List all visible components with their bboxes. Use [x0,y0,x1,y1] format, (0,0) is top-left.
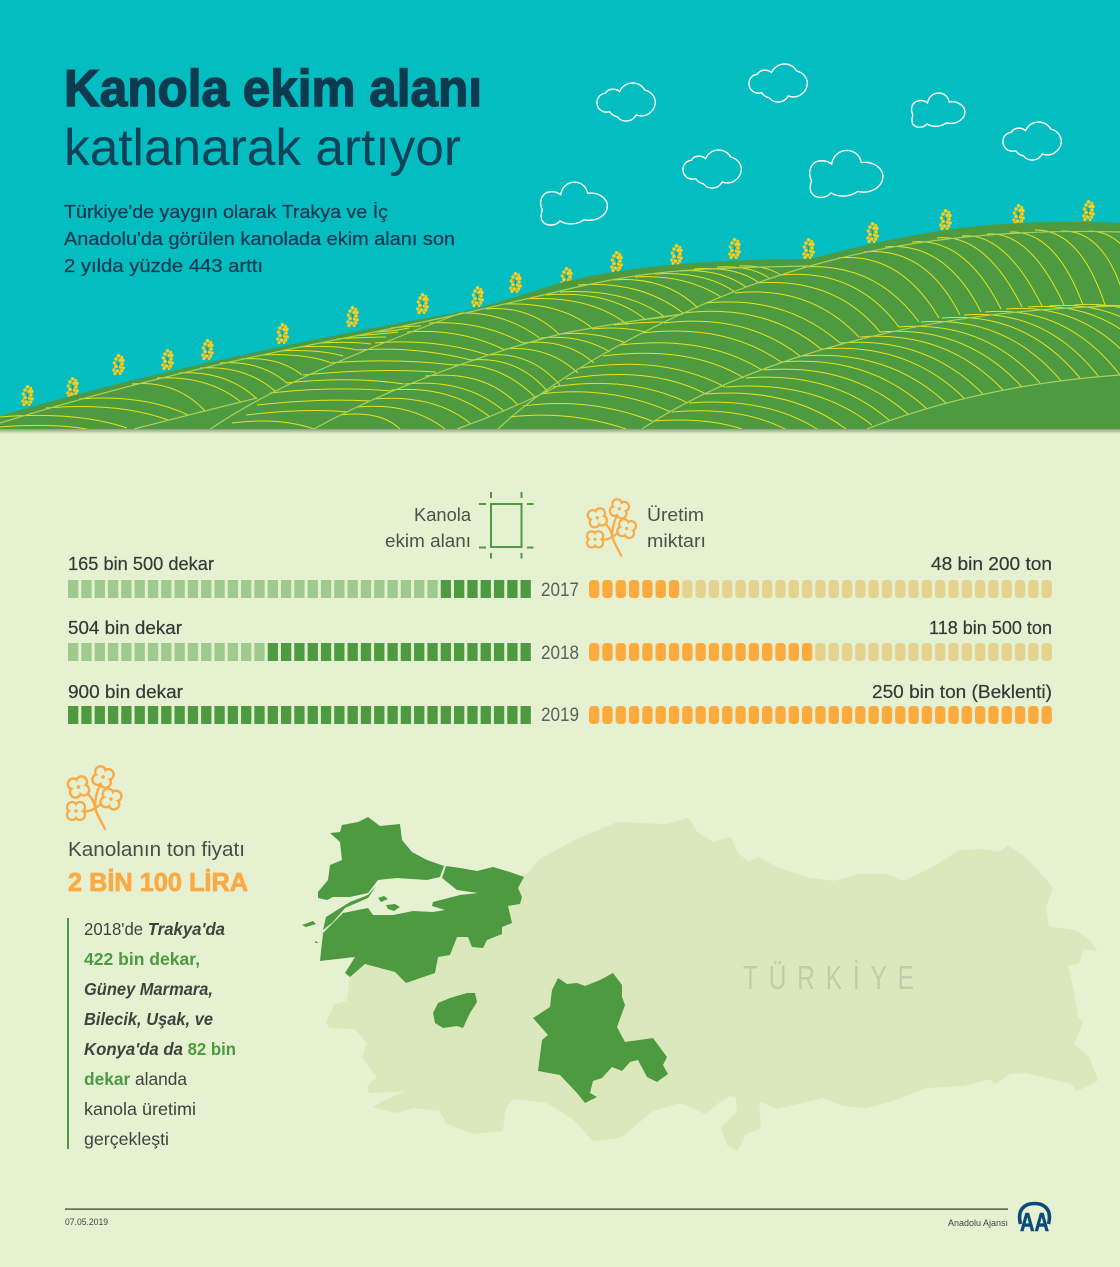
row 2018: 504 bin dekar [68,618,182,638]
row 2019: 900 bin dekar [68,682,183,702]
region: Gallipoli [323,886,376,930]
row 2019: 2019 [541,705,579,726]
row 2017: 48 bin 200 ton [931,554,1052,574]
row 2019 [68,682,1052,726]
production bar 2017 [589,580,1052,598]
region: South Marmara [320,866,524,983]
title: Kanola ekim alanı [64,60,482,118]
text block: regional production [67,918,236,1149]
row 2018 [68,618,1052,664]
legend: cultivated area: Kanola [414,504,472,525]
text block: regional production: kanola üretimi [84,1099,196,1119]
region: Thrace [318,817,444,900]
date: 07.05.2019 [65,1217,108,1227]
text block: regional production: Bilecik, Uşak, ve [84,1009,213,1029]
text block: regional production: Konya'da da 82 bin [84,1039,236,1059]
source: Anadolu Ajansı [948,1218,1008,1228]
intro text: Türkiye'de yaygın olarak Trakya ve İç [64,202,388,222]
production bar 2019 [589,706,1052,724]
footer rule [65,1208,1008,1210]
text block: regional production: 2018'de Trakya'da [84,919,225,939]
area bar 2018 [68,643,531,661]
icon: field frame [479,492,534,558]
region: islands [302,896,400,943]
icon: canola flowers [588,499,636,556]
legend: production: Üretim [647,504,704,525]
intro text: 2 yılda yüzde 443 arttı [64,256,263,276]
highlighted provinces [302,817,668,1103]
area bar 2019 [68,706,531,724]
row 2017: 2017 [541,580,579,601]
text block: regional production: gerçekleşti [84,1129,169,1149]
legend: production [588,499,706,556]
canola plants along the ridge [21,200,1095,406]
title [64,60,482,177]
text block: regional production: dekar alanda [84,1069,187,1089]
row 2018: 118 bin 500 ton [929,618,1052,638]
logo: Anadolu Agency: AA [1020,1207,1049,1237]
shadow under the hills [0,429,1120,434]
price block: 2 BİN 100 LİRA [68,867,248,897]
map label: TÜRKİYE [743,959,914,997]
green hills with field furrows [0,222,1120,430]
production bar 2018 [589,643,1052,661]
intro text: Anadolu'da görülen kanolada ekim alanı son [64,229,455,249]
clouds [541,64,1061,225]
region: Uşak [433,993,477,1028]
sky panel [0,0,1120,430]
area bar 2017 [68,580,531,598]
region: Konya [533,973,668,1103]
row 2017: 165 bin 500 dekar [68,554,214,574]
row 2019: 250 bin ton (Beklenti) [872,682,1052,702]
legend: production: miktarı [647,530,706,551]
price block: Kanolanın ton fiyatı [68,839,245,861]
price block [68,839,248,897]
legend: cultivated area: ekim alanı [385,530,471,551]
row 2017 [68,554,1052,601]
text block: regional production: 422 bin dekar, [84,949,200,969]
icon: canola flowers large [68,766,121,829]
text block: regional production: Güney Marmara, [84,979,213,999]
row 2018: 2018 [541,643,579,664]
map of Turkey [327,819,1097,1150]
intro text [64,202,455,276]
legend: cultivated area [385,492,534,558]
title: katlanarak artıyor [64,119,461,177]
